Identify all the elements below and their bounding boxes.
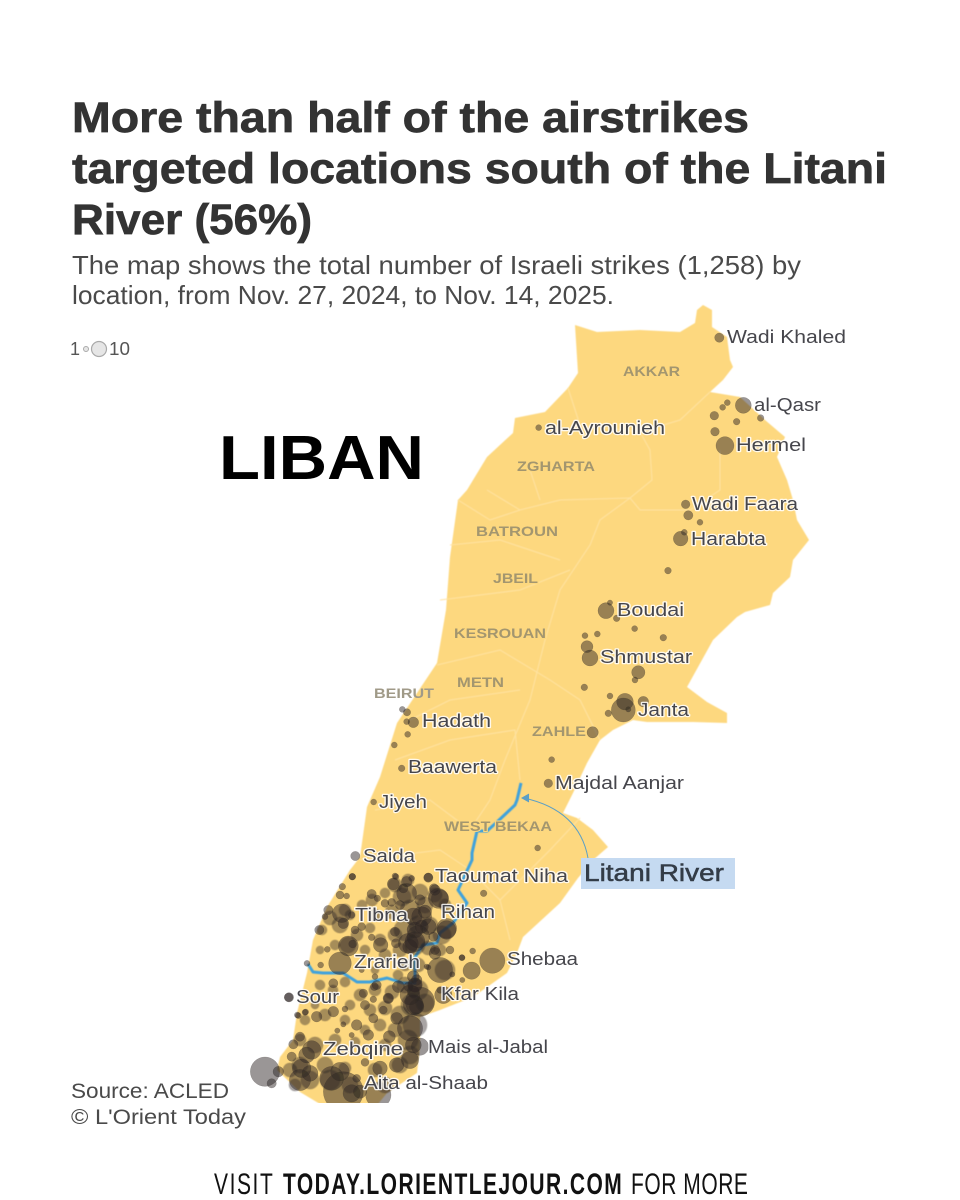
source: [71, 1080, 247, 1129]
source: Source: ACLED: [71, 1080, 229, 1103]
footer call to action: TODAY.LORIENTLEJOUR.COM: [283, 1169, 622, 1200]
place labels: Hadath: [422, 710, 491, 731]
district labels: ZAHLE: [532, 723, 586, 739]
place labels: Harabta: [691, 528, 767, 549]
country name: LIBAN: [219, 424, 424, 493]
place labels: al-Ayrounieh: [545, 417, 665, 438]
strike circles south east: [284, 851, 505, 1018]
place labels: Baawerta: [408, 756, 498, 777]
place labels: Janta: [638, 699, 690, 720]
district labels: BATROUN: [476, 523, 558, 539]
place labels: Majdal Aanjar: [555, 772, 684, 793]
place labels: Rihan: [441, 901, 495, 922]
place labels: Taoumat Niha: [435, 865, 569, 886]
callout: Litani River: Litani River: [584, 860, 724, 887]
size legend: 10: [109, 339, 130, 359]
dense strike cluster south of the Litani: [283, 874, 455, 1093]
title: targeted locations south of the Litani: [72, 145, 887, 193]
title: More than half of the airstrikes: [72, 94, 749, 142]
place labels: Kfar Kila: [441, 983, 520, 1004]
subtitle: The map shows the total number of Israeli strikes (1,258) by: [72, 250, 801, 280]
place labels: Sour: [296, 986, 339, 1007]
district labels: BEIRUT: [374, 685, 434, 701]
footer call to action: VISIT: [214, 1169, 273, 1200]
place labels: Wadi Faara: [692, 493, 799, 514]
place labels: Jiyeh: [379, 791, 427, 812]
place labels: Zrarieh: [354, 951, 420, 972]
subtitle: [72, 250, 801, 310]
place labels: al-Qasr: [754, 394, 821, 415]
callout: Litani River: [581, 858, 735, 889]
Litani river: [308, 783, 521, 983]
district labels: ZGHARTA: [517, 458, 595, 474]
place labels: Tibna: [355, 904, 409, 925]
place labels: Hermel: [736, 434, 806, 455]
size legend: [70, 339, 130, 359]
district labels: AKKAR: [623, 363, 680, 379]
strike circles Tibna and Zrarieh: [304, 873, 465, 992]
place labels: Zebqine: [323, 1038, 403, 1059]
district labels: WEST BEKAA: [444, 818, 552, 834]
district labels: KESROUAN: [454, 625, 546, 641]
strike circles Sour to Aita al-Shaab: [250, 993, 429, 1112]
footer call to action: FOR MORE: [631, 1169, 748, 1200]
place labels: Shebaa: [507, 948, 579, 969]
district borders: [360, 388, 720, 940]
title: River (56%): [72, 196, 312, 244]
place labels: Boudai: [617, 599, 684, 620]
strike circles north: [536, 333, 764, 574]
place labels: Wadi Khaled: [727, 326, 846, 347]
source: © L'Orient Today: [71, 1106, 247, 1129]
footer call to action: [214, 1169, 748, 1200]
place labels: Mais al-Jabal: [428, 1036, 548, 1057]
place labels: [296, 326, 846, 1093]
size legend: 1: [70, 339, 80, 359]
subtitle: location, from Nov. 27, 2024, to Nov. 14, 2025.: [72, 280, 614, 310]
arrow: Litani River callout: [522, 794, 588, 858]
place labels: Saida: [363, 845, 416, 866]
strike circles centre: [371, 600, 667, 851]
district labels: JBEIL: [493, 570, 538, 586]
place labels: Shmustar: [600, 646, 692, 667]
district labels: METN: [457, 674, 504, 690]
map of Lebanon: [250, 305, 809, 1112]
place labels: Aita al-Shaab: [364, 1072, 488, 1093]
country shape: [277, 305, 809, 1110]
district labels: [374, 363, 680, 834]
title: [72, 94, 887, 244]
